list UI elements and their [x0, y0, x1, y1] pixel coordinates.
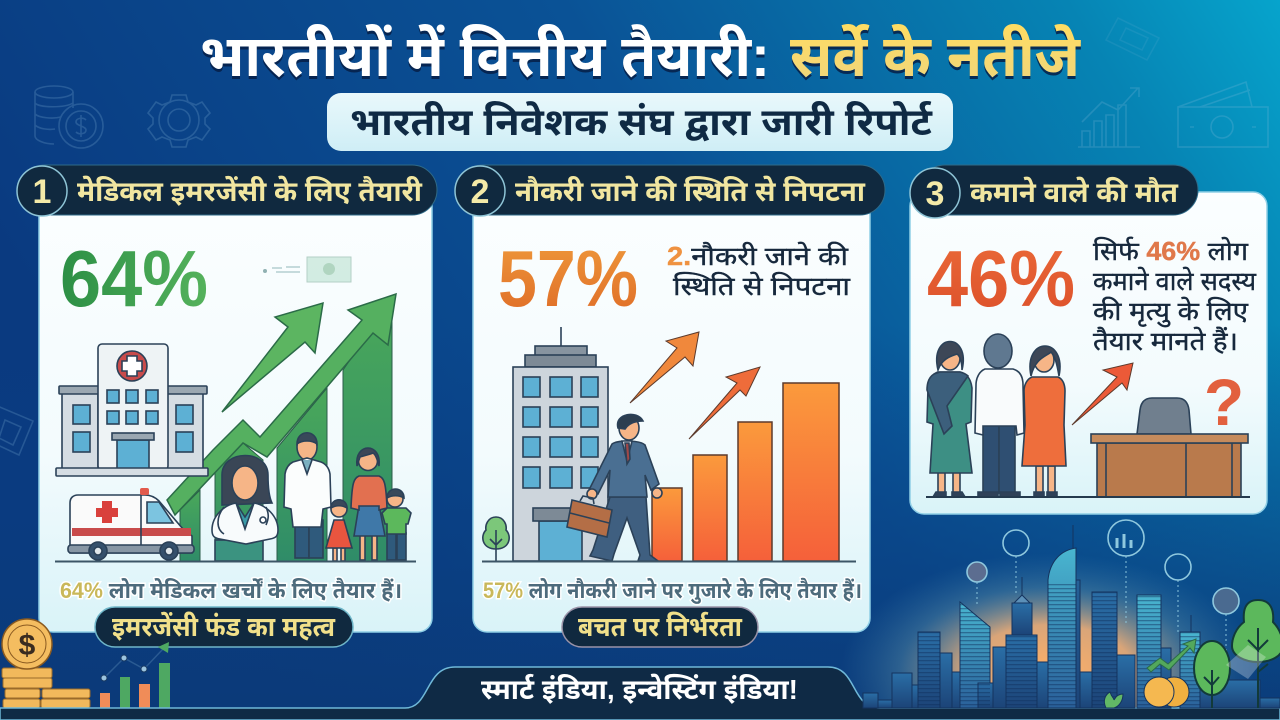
panel 1 card — [39, 190, 432, 632]
subtitle banner: भारतीय निवेशक संघ द्वारा जारी रिपोर्ट — [350, 100, 933, 144]
icon: tree — [483, 517, 509, 561]
panel 1 header: मेडिकल इमरजेंसी के लिए तैयारी — [77, 174, 423, 207]
panel 3 header: 3 — [926, 175, 944, 213]
icon: coin stack watermark — [35, 86, 103, 148]
panel 2 card — [473, 190, 870, 632]
footer bar: स्मार्ट इंडिया, इन्वेस्टिंग इंडिया! — [481, 672, 798, 705]
panel 3 text: तैयार मानते हैं। — [1093, 326, 1238, 356]
subtitle banner — [327, 93, 953, 151]
panel 2 tag pill: बचत पर निर्भरता — [578, 611, 743, 642]
panel 3 baseline — [926, 496, 1250, 498]
watermark diamond — [1226, 645, 1266, 679]
panel 3 text: सिर्फ 46% लोग — [1093, 236, 1248, 266]
icon: businessman walking — [567, 414, 662, 561]
arrow: big green zigzag — [167, 294, 396, 515]
icon: flying banknote — [263, 257, 351, 282]
title: भारतीयों में वित्तीय तैयारी: — [200, 23, 770, 89]
panel 2 text: 2.नौकरी जाने की — [667, 241, 849, 271]
icon: banknote watermark left — [0, 405, 33, 455]
icon: family — [326, 448, 411, 561]
title: सर्वे के नतीजे — [790, 24, 1081, 89]
panel 2 header — [455, 165, 885, 216]
panel 1 baseline — [55, 560, 416, 562]
icon: man — [975, 334, 1024, 497]
panel 3 percent: 46% — [927, 234, 1075, 323]
panel 2 text — [667, 241, 851, 301]
icon: hospital — [56, 344, 208, 476]
panel 2 baseline — [482, 560, 856, 562]
title — [200, 23, 1081, 89]
icon: trees — [1194, 600, 1280, 708]
skyline buildings — [863, 525, 1280, 708]
panel 3 text: की मृत्यु के लिए — [1093, 296, 1249, 327]
footer bar — [0, 667, 1280, 720]
panel 1 tag pill — [95, 607, 353, 647]
icon: cash watermark — [1178, 82, 1268, 147]
question mark: ? — [1204, 365, 1244, 439]
panel 3 text — [1093, 236, 1257, 356]
icon: gold coins: $ — [19, 629, 36, 662]
skyline data icons — [967, 520, 1239, 654]
icon: desk — [1091, 434, 1248, 497]
icon: ambulance — [68, 488, 194, 560]
panel 1 header — [17, 165, 437, 216]
icon: office building — [513, 327, 608, 561]
icon: coins and arrow — [1104, 639, 1196, 708]
icon: gear watermark — [148, 95, 210, 147]
panel 1 caption: 64% लोग मेडिकल खर्चों के लिए तैयार हैं। — [60, 577, 402, 603]
arrow: orange up 2 — [689, 367, 760, 439]
panel 1 percent: 64% — [60, 234, 208, 323]
panel 2 tag pill — [562, 607, 758, 647]
panel 3 header: कमाने वाले की मौत — [970, 175, 1179, 208]
panel 3 header — [910, 165, 1198, 218]
arrow: small green up — [222, 303, 323, 412]
arrow: orange up 1 — [630, 332, 699, 403]
icon: woman in sari — [927, 342, 972, 497]
icon: empty chair — [1137, 398, 1191, 434]
panel 1 tag pill: इमरजेंसी फंड का महत्व — [112, 611, 336, 642]
chart bars orange — [652, 383, 839, 561]
mini bar chart — [100, 642, 170, 708]
icon: male doctor — [284, 433, 331, 558]
chart bars green — [180, 300, 392, 561]
panel 2 header: 2 — [471, 173, 489, 211]
panel 2: job loss — [473, 190, 870, 632]
panel 2 caption: 57% लोग नौकरी जाने पर गुजारे के लिए तैयार हैं। — [483, 577, 862, 604]
panel 3 card — [910, 192, 1267, 514]
skyline window stripes — [918, 584, 1200, 708]
icon: female doctor — [212, 456, 278, 561]
panel 3 text: कमाने वाले सदस्य — [1093, 266, 1257, 296]
panel 2 percent: 57% — [498, 234, 638, 323]
panel 2 text: स्थिति से निपटना — [673, 271, 851, 301]
icon: line chart watermark — [1078, 88, 1140, 147]
city skyline — [863, 520, 1280, 708]
arrow: red up — [1072, 363, 1133, 425]
panel 2 header: नौकरी जाने की स्थिति से निपटना — [515, 174, 866, 207]
icon: woman in orange dress — [1022, 346, 1066, 497]
icon: banknote watermark top right — [1106, 18, 1159, 60]
skyline glow — [840, 470, 1260, 708]
panel 1: medical emergency — [39, 190, 432, 632]
panel 3: earner death — [910, 192, 1267, 514]
icon: gold coins — [2, 619, 90, 708]
panel 1 header: 1 — [33, 173, 51, 211]
